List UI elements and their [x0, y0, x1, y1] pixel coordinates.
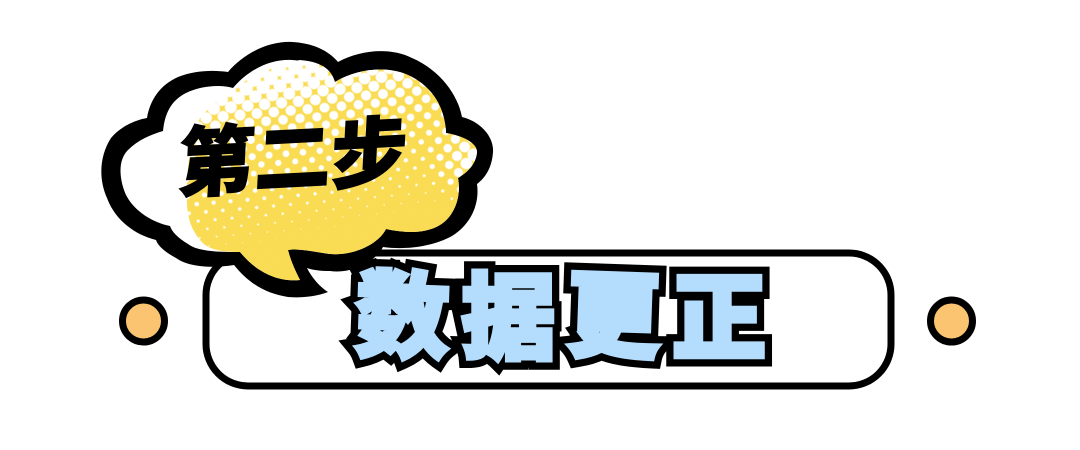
bubble outline	[101, 42, 493, 297]
main heading: 据	[462, 266, 556, 371]
main heading: 数	[354, 263, 451, 372]
main heading: 更	[565, 263, 662, 372]
bubble white interior	[121, 60, 477, 280]
main heading: 数	[354, 263, 451, 372]
icon: left orange dot	[122, 300, 164, 342]
speech bubble cloud	[101, 42, 493, 297]
step label: 二	[253, 115, 333, 204]
main heading: 正	[672, 266, 766, 371]
main heading: 更	[565, 263, 662, 372]
step label: 步	[329, 111, 409, 200]
title box: rounded frame	[206, 253, 891, 386]
step label	[176, 111, 409, 208]
main heading	[354, 263, 766, 372]
main heading: 据	[462, 266, 556, 371]
step label: 第	[176, 119, 256, 208]
icon: right orange dot	[930, 300, 972, 342]
halftone yellow fill	[186, 60, 477, 280]
main heading: 正	[672, 266, 766, 371]
